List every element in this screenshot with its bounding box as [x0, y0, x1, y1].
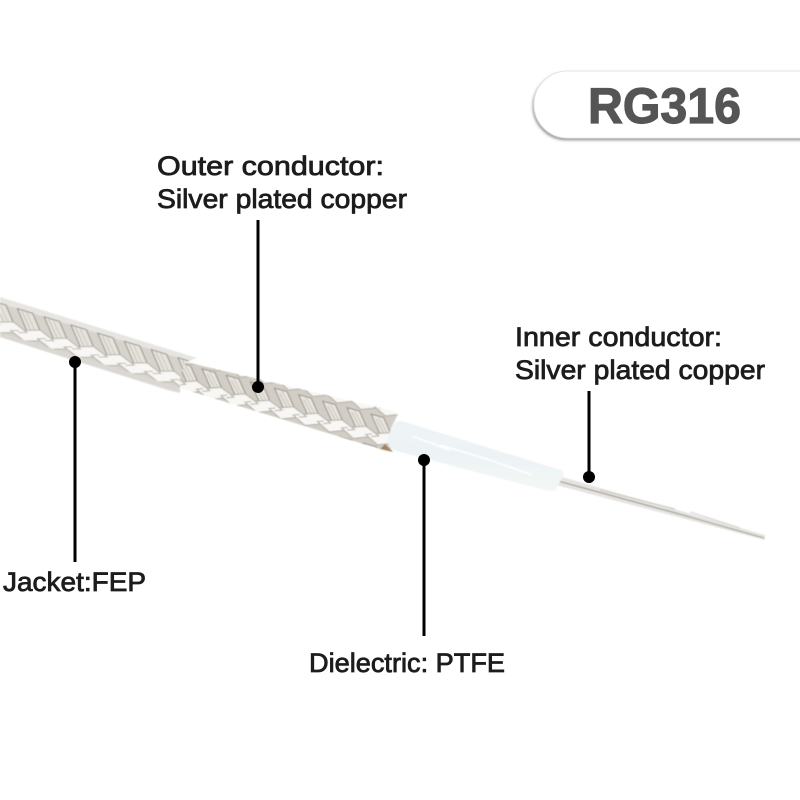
label: inner conductor [515, 322, 765, 385]
label: jacket: Jacket:FEP [3, 567, 146, 597]
leader: inner conductor [583, 391, 595, 483]
leader: dielectric [418, 454, 430, 636]
label: inner conductor: Inner conductor: [515, 322, 722, 352]
jacket FEP [0, 297, 197, 393]
label: outer conductor: Outer conductor: [157, 151, 384, 181]
outer braid [179, 362, 398, 452]
leader: jacket [69, 356, 81, 562]
label: dielectric: Dielectric: PTFE [309, 648, 505, 678]
leader: outer conductor [252, 220, 264, 393]
badge: RG316: RG316 [588, 78, 741, 134]
cable photo [0, 297, 765, 540]
badge: RG316 [534, 71, 800, 138]
inner conductor wire [556, 477, 765, 540]
label: outer conductor [157, 151, 407, 214]
label: outer conductor: Silver plated copper [157, 184, 407, 214]
dielectric PTFE [386, 421, 563, 491]
label: inner conductor: Silver plated copper [515, 355, 765, 385]
